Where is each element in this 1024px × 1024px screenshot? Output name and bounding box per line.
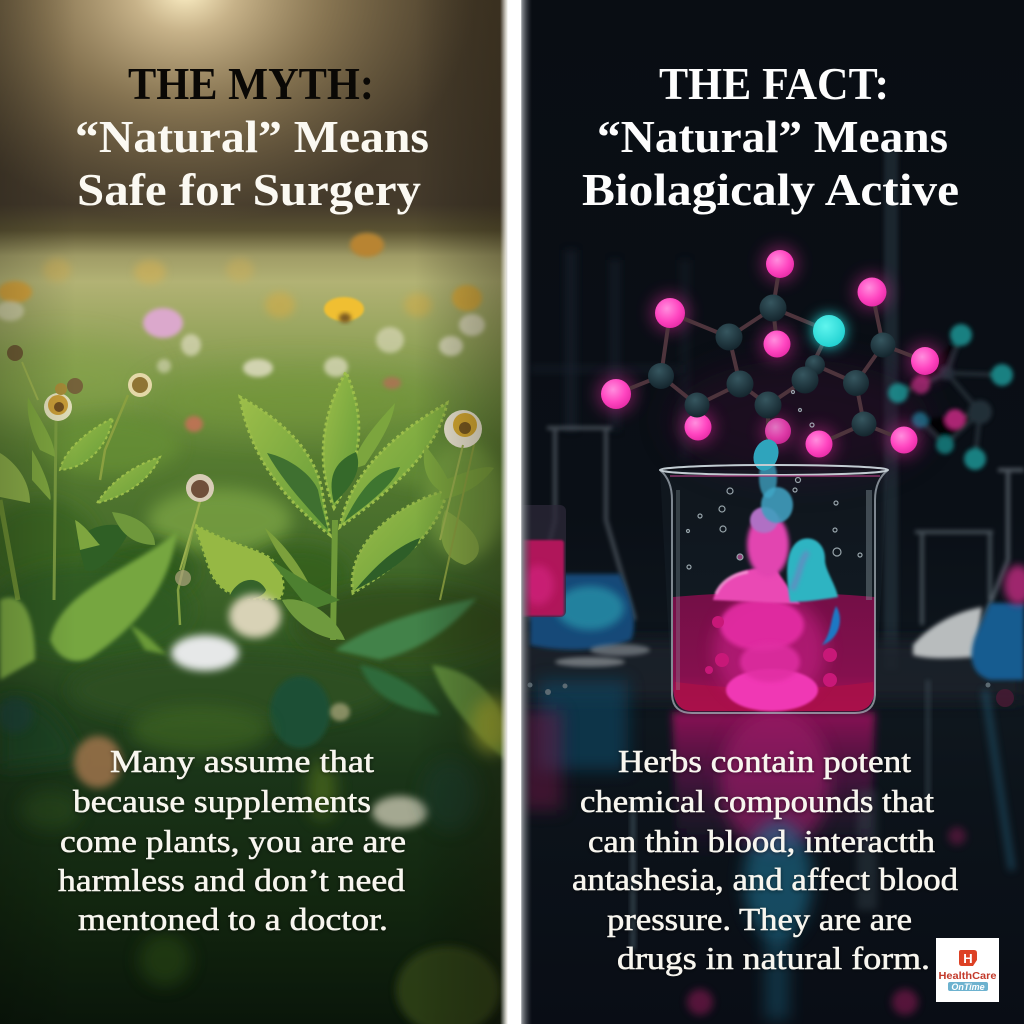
- white cloth: [913, 607, 982, 658]
- cyan atom: [813, 315, 845, 347]
- blurred foreground leaves: [0, 532, 506, 770]
- pink plume: [705, 507, 837, 711]
- body text: the myth: come plants, you are are: [60, 823, 406, 859]
- body text: the myth: because supplements: [73, 783, 371, 819]
- body text: the fact: antashesia, and affect blood: [572, 861, 958, 897]
- dark atoms: [648, 294, 896, 436]
- logo ribbon: OnTime: [951, 982, 985, 992]
- beaker glass interior: [660, 470, 888, 713]
- heading: the fact: [582, 58, 959, 215]
- flower heads: [7, 345, 482, 586]
- central white divider: [500, 0, 532, 1024]
- table reflections: [520, 680, 1012, 1020]
- heading line 1: THE FACT:: [659, 58, 889, 109]
- blurred white blossoms: [171, 594, 350, 721]
- panel: the myth (sunlit meadow): [0, 0, 515, 1024]
- body text: the fact: can thin blood, interactth: [588, 823, 935, 859]
- liquid: [673, 592, 875, 711]
- heading line 3: Safe for Surgery: [77, 164, 421, 215]
- body text: the myth: [58, 743, 406, 937]
- heading line 2: “Natural” Means: [75, 111, 429, 162]
- spilled droplets: [528, 682, 1014, 707]
- lower bokeh: [0, 697, 512, 1024]
- heading line 3: Biolagicaly Active: [582, 164, 959, 215]
- molecule glow: [597, 246, 943, 461]
- bubbles: [686, 390, 862, 569]
- heading: the myth: [75, 58, 429, 215]
- herb plant: main: [195, 372, 494, 640]
- back right glass stand: [915, 532, 993, 625]
- body text: the myth: harmless and don’t need: [58, 862, 405, 898]
- heading line 1: THE MYTH:: [128, 58, 374, 109]
- blurred background flowers: [0, 233, 485, 432]
- right flask: [972, 470, 1024, 680]
- white powder on table: [555, 644, 650, 667]
- blue liquid: [530, 574, 634, 650]
- flower stems: [22, 362, 463, 570]
- edge vignette: [0, 0, 506, 1024]
- beaker with reacting liquid: [660, 390, 888, 713]
- herb plant: left: [0, 395, 475, 625]
- sun glow: [0, 0, 444, 204]
- molecule bonds: [629, 277, 913, 440]
- logo icon: H badge: H: [963, 951, 973, 966]
- body text: the fact: Herbs contain potent: [618, 743, 911, 779]
- back left flask: [518, 428, 635, 650]
- body text: the myth: mentoned to a doctor.: [78, 901, 388, 937]
- body text: the myth: Many assume that: [110, 743, 374, 779]
- blurred lab background: [518, 150, 1024, 700]
- molecule structure: [597, 246, 943, 461]
- body text: the fact: chemical compounds that: [580, 783, 934, 819]
- pink liquid in small glass: [518, 540, 564, 616]
- logo: HealthCare OnTime: [936, 938, 999, 1002]
- logo wordmark: HealthCare: [938, 970, 997, 982]
- pink atoms: [601, 250, 939, 458]
- beaker walls and rim: [660, 465, 888, 713]
- body text: the fact: [572, 743, 958, 976]
- faint molecule at right: [888, 324, 1013, 470]
- body text: the fact: pressure. They are are: [607, 901, 912, 937]
- cyan plume: [749, 436, 840, 645]
- heading line 2: “Natural” Means: [597, 111, 948, 162]
- blurred meadow background: [0, 372, 503, 719]
- body text: the fact: drugs in natural form.: [617, 940, 930, 976]
- panel: the fact (dark laboratory): [518, 0, 1024, 1024]
